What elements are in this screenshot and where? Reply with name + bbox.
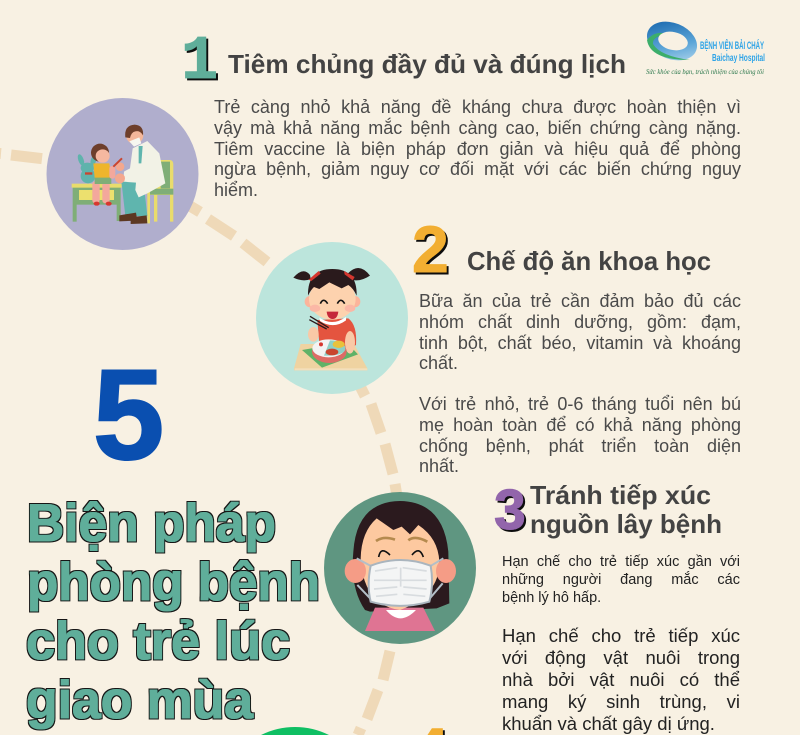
title: phòng bệnh xyxy=(27,553,320,612)
heading 3: Tránh tiếp xúc xyxy=(530,480,711,510)
logo: Baichay Hospital: Baichay Hospital xyxy=(712,53,765,64)
circle illustration: girl wearing face mask xyxy=(324,492,476,644)
text block: avoid sick contacts xyxy=(502,554,740,606)
text block: scientific diet: nhất. xyxy=(419,456,459,476)
text block: avoid pets: nhà bởi vật nuôi có thể xyxy=(502,669,740,690)
circle: fourth measure, green xyxy=(261,727,329,735)
text block: scientific diet: Bữa ăn của trẻ cần đảm bảo đủ các xyxy=(419,291,741,311)
big number 5: 5 xyxy=(93,344,164,487)
text block: vaccination: hiểm. xyxy=(214,180,258,200)
text block: vaccination: Trẻ càng nhỏ khả năng đề kháng chưa được hoàn thiện vì xyxy=(214,97,741,117)
title xyxy=(26,494,320,730)
circle illustration: child receiving vaccine from doctor xyxy=(46,98,198,250)
heading 3: nguồn lây bệnh xyxy=(530,509,722,539)
heading 1: Tiêm chủng đầy đủ và đúng lịch xyxy=(228,49,626,79)
number 3: 3 xyxy=(494,478,526,542)
text block: avoid sick contacts: Hạn chế cho trẻ tiếp xúc gần với xyxy=(502,554,740,570)
number 2: 2 xyxy=(412,212,449,286)
text block: scientific diet xyxy=(419,291,741,476)
title: giao mùa xyxy=(26,671,254,730)
logo: Baichay Hospital xyxy=(641,15,765,76)
text block: scientific diet: nhóm chất dinh dưỡng, gồm: đạm, xyxy=(419,312,741,332)
logo: Baichay Hospital: Sức khỏe của bạn, trách nhiệm của chúng tôi xyxy=(646,68,764,76)
circle illustration: girl eating bento xyxy=(256,242,408,394)
text block: vaccination: vậy mà khả năng mắc bệnh càng cao, biến chứng càng nặng. xyxy=(214,118,741,138)
text block: vaccination: ngừa bệnh, giảm nguy cơ đối mặt với các biến chứng nguy xyxy=(214,159,741,179)
heading 3 xyxy=(530,480,722,539)
text block: vaccination: Tiêm vaccine là biện pháp đơn giản và hiệu quả để phòng xyxy=(214,138,741,158)
text block: avoid sick contacts: những người đang mắc các xyxy=(502,572,740,588)
heading 2: Chế độ ăn khoa học xyxy=(467,246,711,276)
text block: scientific diet: chống bệnh, phát triển toàn diện xyxy=(419,436,741,456)
title: Biện pháp xyxy=(27,494,276,553)
text block: scientific diet: chất. xyxy=(419,353,458,373)
text block: avoid pets: Hạn chế cho trẻ tiếp xúc xyxy=(502,625,740,646)
text block: scientific diet: tinh bột, chất béo, vitamin và khoáng xyxy=(419,332,741,352)
text block: vaccination xyxy=(214,97,741,200)
text block: avoid sick contacts: bệnh lý hô hấp. xyxy=(502,590,601,606)
text block: avoid pets: khuẩn và chất gây dị ứng. xyxy=(502,713,715,734)
text block: avoid pets: với động vật nuôi trong xyxy=(502,647,740,668)
title: cho trẻ lúc xyxy=(26,612,290,671)
text block: scientific diet: mẹ hoàn toàn để có khả năng phòng xyxy=(419,415,741,435)
text block: avoid pets xyxy=(502,625,740,734)
text block: avoid pets: mang ký sinh trùng, vi xyxy=(502,691,740,712)
text block: scientific diet: Với trẻ nhỏ, trẻ 0-6 tháng tuổi nên bú xyxy=(419,394,741,414)
number 1: 1 xyxy=(181,26,218,97)
